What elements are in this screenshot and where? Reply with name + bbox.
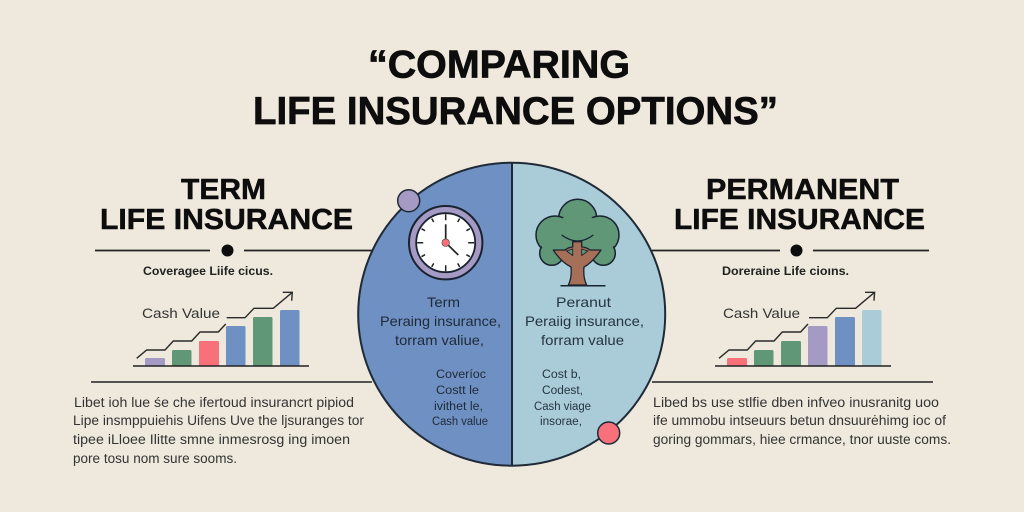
heading: term life insurance: LIFE INSURANCE	[100, 204, 353, 236]
text block: term centre	[380, 294, 501, 348]
title	[253, 44, 778, 133]
list: term features: Costt le	[436, 385, 479, 397]
bar chart: cash value	[715, 292, 891, 366]
heading: permanent life insurance: PERMANENT	[706, 174, 899, 206]
bar chart: cash value: Cash Value	[142, 305, 220, 321]
heading: permanent life insurance	[674, 174, 925, 236]
panel: central comparison circle	[358, 163, 665, 466]
list: permanent features: Cash viage	[534, 401, 591, 413]
list: permanent features: Cost b,	[542, 369, 581, 381]
bar chart: cash value: Cash Value	[723, 305, 800, 321]
text block: permanent centre: Peranut	[556, 294, 611, 310]
bar chart: cash value	[133, 292, 309, 366]
text block: permanent centre: Peraiig insurance,	[525, 313, 644, 329]
subheading: Doreraine Life cioıns.	[722, 266, 849, 278]
heading: term life insurance: TERM	[181, 174, 266, 206]
text block: term description	[73, 382, 372, 466]
list: permanent features: insorae,	[540, 416, 582, 428]
text block: term description: pore tosu nom sure sooms.	[73, 451, 237, 466]
text block: term description: Libet ioh lue śe che ifertoud insurancrt pipiod	[74, 395, 354, 410]
title: LIFE INSURANCE OPTIONS”	[253, 90, 778, 133]
text block: term description: tipee iLloee Ilitte smne inmesrosg ing imoen	[73, 432, 350, 447]
panel: term life insurance	[73, 174, 372, 466]
text block: permanent centre: forram value	[541, 332, 624, 348]
text block: permanent description: Libed bs use stlfie dben infveo inusranitg uoo	[653, 395, 939, 410]
list: permanent features: Codest,	[542, 385, 583, 397]
subheading: Coveragee Liife cicus.	[143, 266, 273, 278]
divider with dot	[652, 244, 929, 256]
left half: term	[358, 163, 512, 466]
list: term features: Cash value	[432, 416, 488, 428]
icon: purple dot	[398, 190, 420, 212]
arrow: trend	[137, 292, 292, 358]
text block: term centre: Term	[427, 294, 460, 310]
arrow: trend	[719, 292, 875, 358]
icon: clock	[409, 206, 482, 279]
divider with dot	[95, 244, 372, 256]
text block: term centre: Peraing insurance,	[380, 313, 501, 329]
list: term features	[432, 369, 488, 428]
right half: permanent	[512, 163, 665, 466]
text block: permanent description: goring gommars, hiee crmance, tnor uuste coms.	[653, 432, 951, 447]
text block: permanent centre	[525, 294, 644, 348]
text block: permanent description: ife ummobu intseuurs betun dnsuurėhimg ioc of	[653, 413, 946, 428]
list: permanent features	[534, 369, 591, 428]
list: term features: Coveríoc	[436, 369, 486, 381]
title: “COMPARING	[368, 44, 630, 86]
heading: term life insurance	[100, 174, 353, 236]
icon: tree	[536, 199, 619, 286]
text block: term description: Lipe insmppuiehis Uifens Uve the ljsuranges tor	[73, 413, 365, 428]
text block: permanent description	[652, 382, 951, 447]
panel: permanent life insurance	[652, 174, 951, 447]
list: term features: ivithet le,	[434, 401, 483, 413]
heading: permanent life insurance: LIFE INSURANCE	[674, 204, 925, 236]
icon: red dot	[598, 422, 620, 444]
text block: term centre: torram valiue,	[395, 332, 484, 348]
